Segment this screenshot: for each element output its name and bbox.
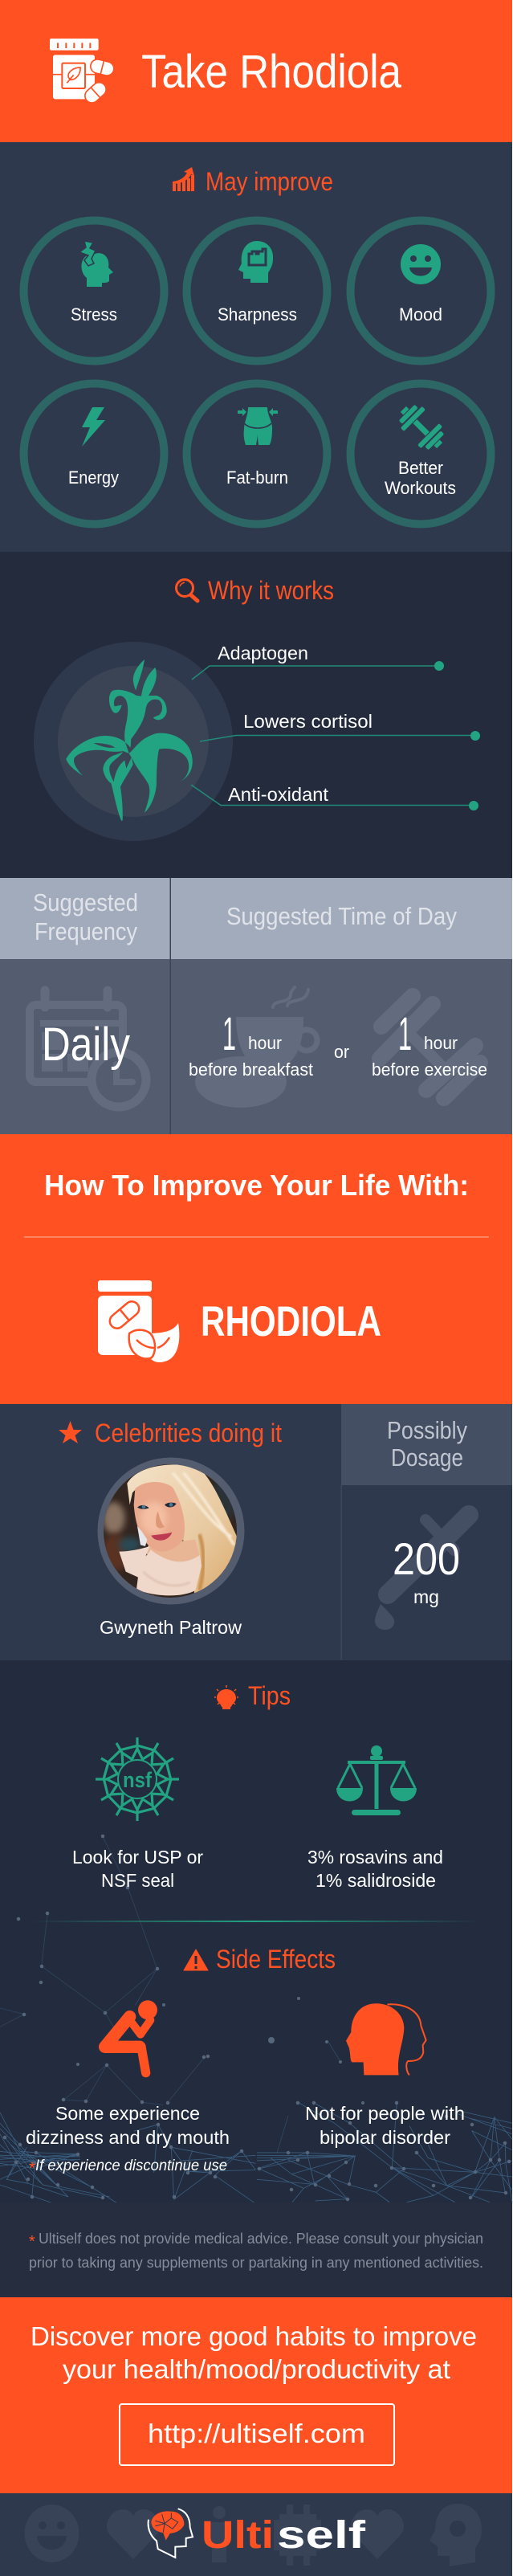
benefit: fat-burn — [186, 384, 328, 524]
icon: head in hands figure — [105, 2000, 157, 2073]
benefit: better workouts — [350, 384, 491, 524]
icon: dumbbell — [380, 996, 480, 1098]
heading: suggested frequency — [33, 888, 138, 945]
icon: two heads — [346, 2003, 426, 2075]
panel: possibly dosage: Dosage — [391, 1443, 463, 1472]
heading: suggested frequency: Suggested — [33, 888, 138, 917]
time: before exercise: before exercise — [372, 1059, 487, 1080]
side effect: bipolar: Not for people with — [305, 2103, 465, 2124]
call to action text — [31, 2321, 477, 2384]
icon: magnifier — [177, 580, 197, 601]
time: before exercise: hour — [424, 1033, 458, 1053]
network background — [0, 1836, 255, 2203]
time: before breakfast: before breakfast — [189, 1059, 313, 1080]
icon: warning triangle — [184, 1949, 208, 1970]
disclaimer: * — [29, 2233, 35, 2251]
side effect: dizziness: dizziness and dry mouth — [26, 2127, 230, 2148]
panel: call to action — [0, 2297, 512, 2493]
heading: suggested frequency: Frequency — [35, 917, 137, 945]
side effect: dizziness — [26, 2103, 230, 2178]
time: before breakfast: 1 — [222, 1008, 236, 1060]
logo: ultiself: self — [277, 2514, 366, 2557]
benefit: stress: Stress — [71, 304, 117, 325]
panel: why it works — [0, 552, 512, 878]
value: 200 mg: mg — [413, 1586, 439, 1607]
side effect: bipolar: bipolar disorder — [320, 2127, 450, 2148]
disclaimer: prior to taking any supplements or partaking in any mentioned activities. — [29, 2255, 483, 2271]
benefit: sharpness: Sharpness — [218, 304, 297, 325]
logo: ultiself: Ulti — [202, 2514, 274, 2557]
tip: rosavins: 3% rosavins and — [307, 1847, 443, 1868]
tip: nsf seal: Look for USP or — [72, 1847, 203, 1868]
portrait: gwyneth paltrow — [98, 1457, 244, 1605]
plant illustration — [34, 642, 233, 841]
tip: rosavins: 1% salidroside — [316, 1870, 436, 1891]
value: daily: Daily — [42, 1019, 130, 1071]
heading: tips: Tips — [248, 1681, 291, 1710]
value: 200 mg: 200 — [393, 1533, 460, 1584]
heading: may improve: May improve — [206, 167, 333, 196]
tip: nsf seal — [72, 1847, 203, 1891]
icon: dropper — [375, 1515, 469, 1630]
callout: lowers cortisol: Lowers cortisol — [243, 711, 373, 732]
icon: light bulb — [214, 1685, 238, 1709]
logo: ultiself — [149, 2509, 366, 2558]
icon: rising chart — [173, 167, 194, 191]
call to action text: Discover more good habits to improve — [31, 2321, 477, 2351]
benefit: better workouts: Workouts — [385, 478, 456, 498]
time: before breakfast — [189, 1008, 313, 1080]
panel: header — [0, 0, 512, 142]
benefit: fat-burn: Fat-burn — [226, 467, 288, 488]
heading: how to improve your life with: How To Improve Your Life With: — [44, 1169, 469, 1202]
heading: celebrities doing it: Celebrities doing it — [95, 1419, 282, 1447]
disclaimer — [29, 2231, 483, 2271]
name: gwyneth paltrow: Gwyneth Paltrow — [100, 1617, 242, 1638]
benefit: energy: Energy — [68, 467, 119, 488]
icon: supplement jar with leaf — [98, 1280, 179, 1362]
heading: suggested time of day: Suggested Time of Day — [226, 902, 457, 930]
benefit: mood: Mood — [399, 304, 442, 325]
callout: adaptogen — [192, 643, 444, 680]
call to action text: your health/mood/productivity at — [63, 2354, 450, 2384]
panel: may improve — [0, 142, 512, 552]
icon: star — [59, 1421, 82, 1443]
panel: possibly dosage: Possibly — [387, 1416, 467, 1444]
side effect: bipolar — [305, 2103, 465, 2148]
callout: anti-oxidant — [191, 784, 478, 810]
time: before breakfast: hour — [248, 1033, 282, 1053]
icon: calendar and clock — [30, 990, 146, 1107]
icon: supplement jar with capsules — [50, 39, 116, 106]
panel: how to improve banner — [0, 1134, 512, 1404]
tip: nsf seal: NSF seal — [101, 1870, 174, 1891]
benefit: mood — [350, 220, 491, 361]
callout: lowers cortisol — [200, 711, 480, 741]
button: website url — [120, 2404, 394, 2465]
panel: tips and side effects — [0, 1660, 512, 2297]
title: Take Rhodiola — [141, 46, 402, 98]
tip: rosavins — [307, 1847, 443, 1891]
label: or: or — [334, 1042, 349, 1062]
product name: RHODIOLA — [201, 1298, 381, 1345]
benefit: stress — [24, 220, 164, 361]
benefit: better workouts: Better — [398, 458, 443, 478]
time: before exercise: 1 — [398, 1008, 412, 1060]
side effect: dizziness: If experience discontinue use — [35, 2158, 227, 2174]
benefit: energy — [24, 384, 164, 524]
icon: nsf seal — [92, 1734, 182, 1824]
time: before exercise — [372, 1008, 487, 1080]
decorative footer icons — [24, 2504, 482, 2566]
panel: possibly dosage — [340, 1404, 512, 1660]
disclaimer: Ultiself does not provide medical advice. Please consult your physician — [39, 2231, 483, 2247]
icon: coffee cup — [195, 987, 317, 1108]
heading: why it works: Why it works — [208, 576, 334, 605]
icon: balance scale — [336, 1745, 417, 1815]
icon: nsf seal: nsf — [123, 1768, 153, 1792]
side effect: dizziness: Some experience — [55, 2103, 200, 2124]
heading: side effects: Side Effects — [216, 1945, 336, 1974]
benefit: sharpness — [186, 220, 328, 361]
panel: suggested frequency and time — [0, 878, 512, 1134]
callout: anti-oxidant: Anti-oxidant — [228, 784, 329, 805]
side effect: dizziness: * — [29, 2159, 35, 2178]
panel: celebrities — [0, 1404, 512, 1660]
button: website url: http://ultiself.com — [148, 2419, 365, 2448]
callout: adaptogen: Adaptogen — [218, 643, 308, 663]
panel: footer — [0, 2493, 512, 2576]
value: 200 mg — [393, 1533, 460, 1607]
